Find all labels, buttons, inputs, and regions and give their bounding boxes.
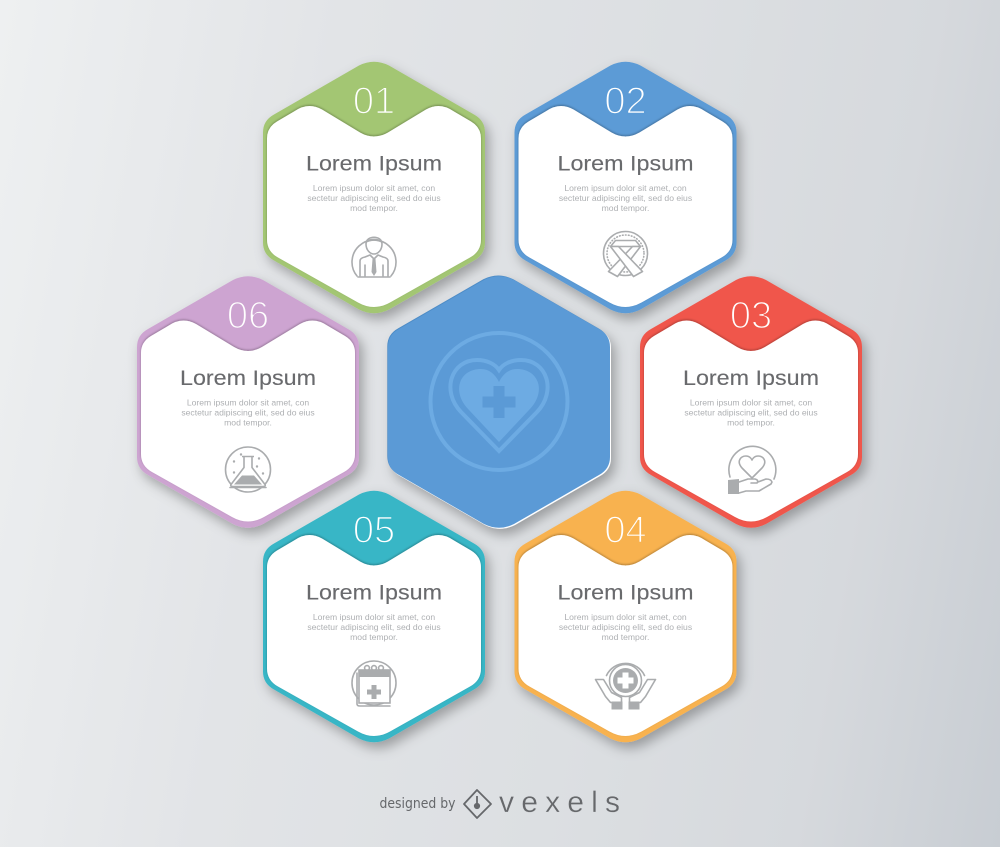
- icon: vexels diamond logo: [464, 790, 491, 818]
- body text: mod tempor.: [602, 632, 649, 642]
- icon: laboratory flask: [226, 447, 270, 492]
- icon: businessman: [352, 237, 396, 277]
- icon: medical calendar: [352, 661, 396, 706]
- body text: sectetur adipiscing elit, sed do eius: [559, 193, 692, 203]
- heading: Lorem Ipsum: [306, 582, 442, 604]
- heading: Lorem Ipsum: [558, 582, 694, 604]
- number 02: 02: [604, 80, 647, 122]
- vexels wordmark: vexels: [499, 786, 620, 819]
- icon: hands holding medical cross: [596, 663, 656, 710]
- number 04: 04: [604, 510, 647, 552]
- heading: Lorem Ipsum: [306, 152, 442, 176]
- panel: 01 green: [263, 62, 485, 313]
- body text: [684, 398, 818, 428]
- body text: [307, 183, 441, 213]
- panel: 06 purple: [137, 276, 359, 528]
- heading: Lorem Ipsum: [683, 367, 819, 390]
- body text: sectetur adipiscing elit, sed do eius: [684, 408, 818, 418]
- designed by label: designed by: [380, 796, 456, 812]
- body text: mod tempor.: [602, 203, 649, 213]
- body text: Lorem ipsum dolor sit amet, con: [564, 612, 687, 622]
- body text: sectetur adipiscing elit, sed do eius: [559, 622, 692, 632]
- body text: sectetur adipiscing elit, sed do eius: [307, 193, 441, 203]
- body text: Lorem ipsum dolor sit amet, con: [313, 612, 435, 622]
- body text: [307, 612, 441, 642]
- body text: sectetur adipiscing elit, sed do eius: [181, 408, 315, 418]
- footer: designed by vexels: [380, 786, 620, 819]
- heading: Lorem Ipsum: [180, 367, 316, 390]
- body text: Lorem ipsum dolor sit amet, con: [564, 183, 687, 193]
- body text: mod tempor.: [350, 632, 398, 642]
- panel: 04 orange: [514, 491, 736, 742]
- panel: 02 blue: [514, 62, 736, 313]
- body text: mod tempor.: [727, 418, 775, 428]
- icon: hand holding heart: [728, 446, 776, 494]
- number 01: 01: [353, 80, 395, 122]
- icon: awareness ribbon: [604, 232, 648, 276]
- panel: 05 teal: [263, 491, 485, 742]
- number 06: 06: [227, 295, 269, 337]
- icon: heart with medical cross: [430, 333, 568, 470]
- body text: Lorem ipsum dolor sit amet, con: [313, 183, 435, 193]
- body text: mod tempor.: [224, 418, 272, 428]
- body text: sectetur adipiscing elit, sed do eius: [307, 622, 441, 632]
- panel: 03 red: [640, 276, 862, 528]
- body text: [181, 398, 315, 428]
- body text: mod tempor.: [350, 203, 398, 213]
- body text: [559, 612, 692, 642]
- number 03: 03: [730, 295, 772, 337]
- body text: Lorem ipsum dolor sit amet, con: [187, 398, 309, 408]
- central hexagon: [387, 276, 611, 529]
- number 05: 05: [353, 510, 395, 552]
- body text: Lorem ipsum dolor sit amet, con: [690, 398, 812, 408]
- body text: [559, 183, 692, 213]
- heading: Lorem Ipsum: [558, 152, 694, 176]
